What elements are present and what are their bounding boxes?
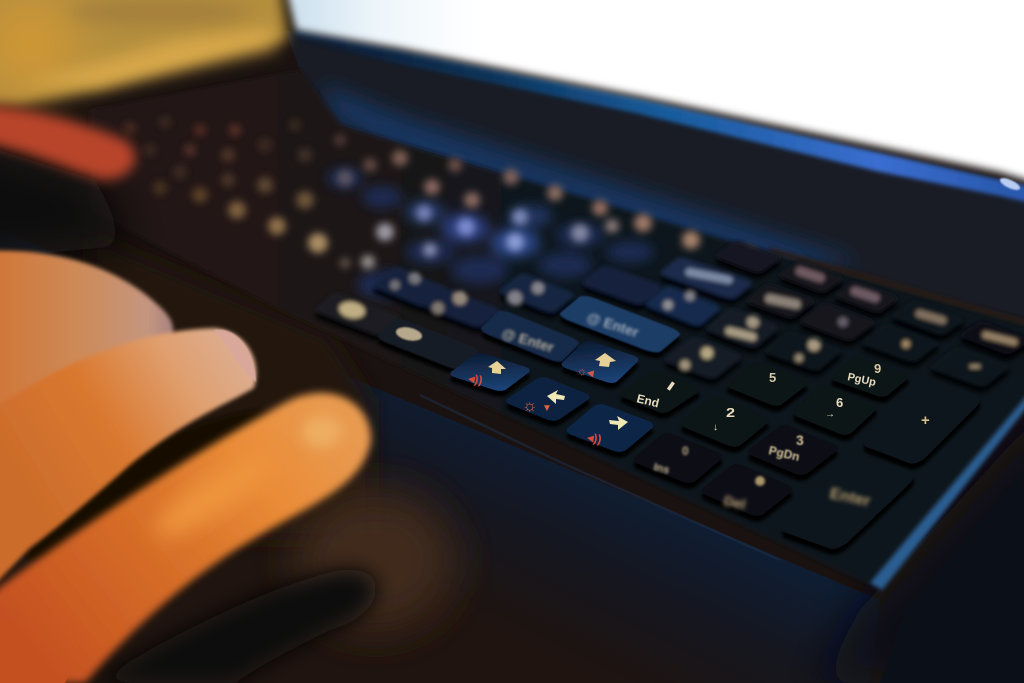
- wide blue keys: @ Enter: [500, 325, 556, 356]
- dark gap between fingers: [25, 410, 300, 560]
- distant dotted keys: [124, 116, 312, 187]
- key legends: PgDn: [767, 443, 801, 464]
- sharp front keys: [447, 339, 985, 552]
- key legends: 0: [682, 444, 689, 458]
- bezel blue glow: [322, 84, 860, 270]
- gold bright left patch: [0, 0, 75, 90]
- far blurred keys: [327, 168, 654, 299]
- mid blurred keys: [313, 240, 1024, 388]
- arrow key legends: ◂)): [585, 430, 603, 446]
- mid key legends: [338, 266, 1018, 370]
- brown hinge strip: [770, 250, 1024, 328]
- key legends: ↓: [713, 422, 718, 433]
- key legends: [466, 353, 930, 512]
- keyboard deck: [90, 70, 1024, 585]
- key legends: →: [825, 409, 835, 420]
- front finger highlight: [146, 442, 284, 548]
- mid key caps: [313, 240, 1024, 388]
- arrow key legends: ☼: [522, 396, 538, 415]
- key legends: Del: [722, 492, 747, 512]
- key legends: +: [921, 412, 930, 429]
- blue laptop edge: [870, 375, 1024, 590]
- bokeh dots: [153, 134, 757, 269]
- hand: [0, 251, 371, 683]
- key legends: 5: [769, 370, 776, 385]
- finger: upper knuckle: [0, 251, 173, 460]
- top-left gold background: [0, 0, 288, 105]
- screen corner glint: [998, 176, 1022, 192]
- wide key legends: [395, 325, 423, 343]
- key legends: Enter: [828, 485, 872, 510]
- laptop palm rest: [0, 230, 1024, 683]
- fingernail: [214, 330, 256, 382]
- wide blue keys: [375, 294, 683, 371]
- numeric key legends: End: [635, 391, 661, 410]
- key legends: 9: [874, 361, 881, 376]
- gold panel: [0, 0, 288, 105]
- arrow key legends: ▼: [542, 403, 552, 414]
- deck front edge highlight: [420, 395, 780, 560]
- finger: front: [0, 393, 371, 683]
- arrow key legends: ◂)): [466, 371, 484, 387]
- hand shadow on laptop: [95, 570, 377, 683]
- wide key caps: [375, 294, 683, 371]
- finger base at the bottom edge: [0, 610, 80, 683]
- gold muted top: [70, 0, 250, 26]
- dark left area: [0, 135, 130, 262]
- key legends: 3: [796, 432, 804, 448]
- key legends: 2: [726, 406, 735, 421]
- finger: index: [0, 328, 256, 610]
- screen: [281, 0, 1024, 190]
- wide blue keys: @ Enter: [585, 309, 641, 341]
- arrow key legends: ☼◂: [575, 363, 596, 380]
- gold bright band: [20, 28, 278, 88]
- laptop hinge and bezel: [285, 30, 1024, 340]
- key legends: Ins: [652, 461, 671, 477]
- key legends: PgUp: [846, 371, 877, 389]
- arrow key legends: [466, 353, 628, 446]
- key legends: 6: [836, 395, 843, 410]
- blue strip under screen: [292, 28, 1024, 206]
- top-left finger: [0, 105, 135, 180]
- far key legends: [124, 116, 757, 269]
- far key blobs: [327, 168, 654, 299]
- front fingertip highlight: [302, 416, 342, 448]
